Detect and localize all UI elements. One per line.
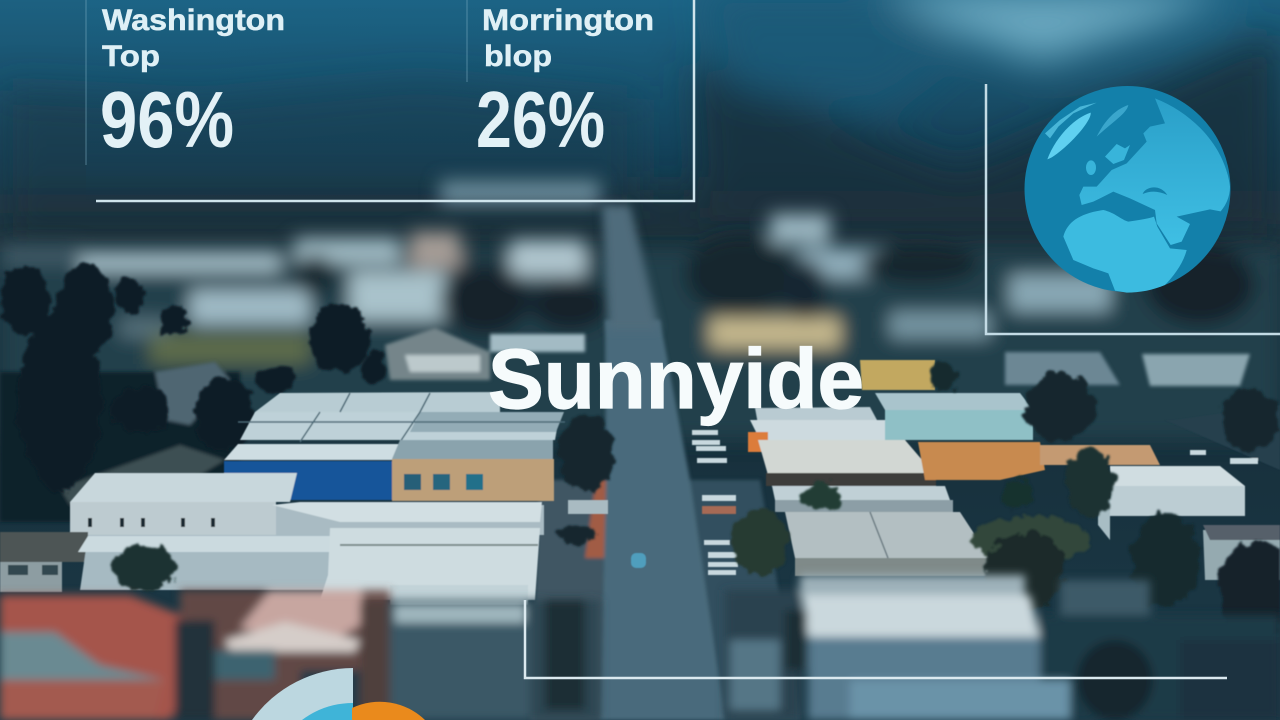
distant blurred town [0, 180, 1280, 440]
icon detail: Scandinavia [1105, 144, 1130, 164]
chart: partial donut [252, 668, 425, 720]
icon detail: Iceland streak [1097, 105, 1128, 137]
panel: globe frame [986, 84, 1280, 334]
stat label: Washington Top [102, 4, 285, 73]
trees among buildings [111, 360, 1280, 640]
parked cars [692, 430, 1258, 575]
stat value: 96%: 96% [100, 75, 234, 164]
icon detail: Eurasia land [1079, 98, 1230, 245]
stat label: Morrington blog: blop [484, 40, 552, 73]
panel rules [86, 0, 694, 201]
stat label: Washington Top: Top [102, 40, 160, 73]
stat label: Washington Top: Washington [102, 4, 285, 37]
distant right buildings [1005, 352, 1250, 386]
title: Sunnyide [488, 332, 864, 426]
warehouse block, blue and tan [0, 392, 608, 605]
icon detail: Caspian sea [1143, 187, 1167, 195]
right-side buildings [631, 360, 1280, 580]
panel: top statistics box [86, 0, 694, 201]
foreground blur: red roofs and buildings [0, 575, 1280, 720]
stat value: 26%: 26% [476, 75, 605, 164]
icon: globe [1024, 86, 1230, 293]
icon detail: Africa land [1063, 210, 1187, 293]
icon detail: Greenland [1047, 113, 1091, 159]
icon detail: British Isles [1086, 160, 1096, 175]
panel: bottom chart frame [525, 600, 1227, 678]
road: far blurred stretch [602, 205, 660, 330]
road [530, 320, 800, 720]
left trees and houses [0, 265, 585, 522]
stat label: Morrington blog [482, 4, 654, 73]
stat label: Morrington blog: Morrington [482, 4, 654, 37]
